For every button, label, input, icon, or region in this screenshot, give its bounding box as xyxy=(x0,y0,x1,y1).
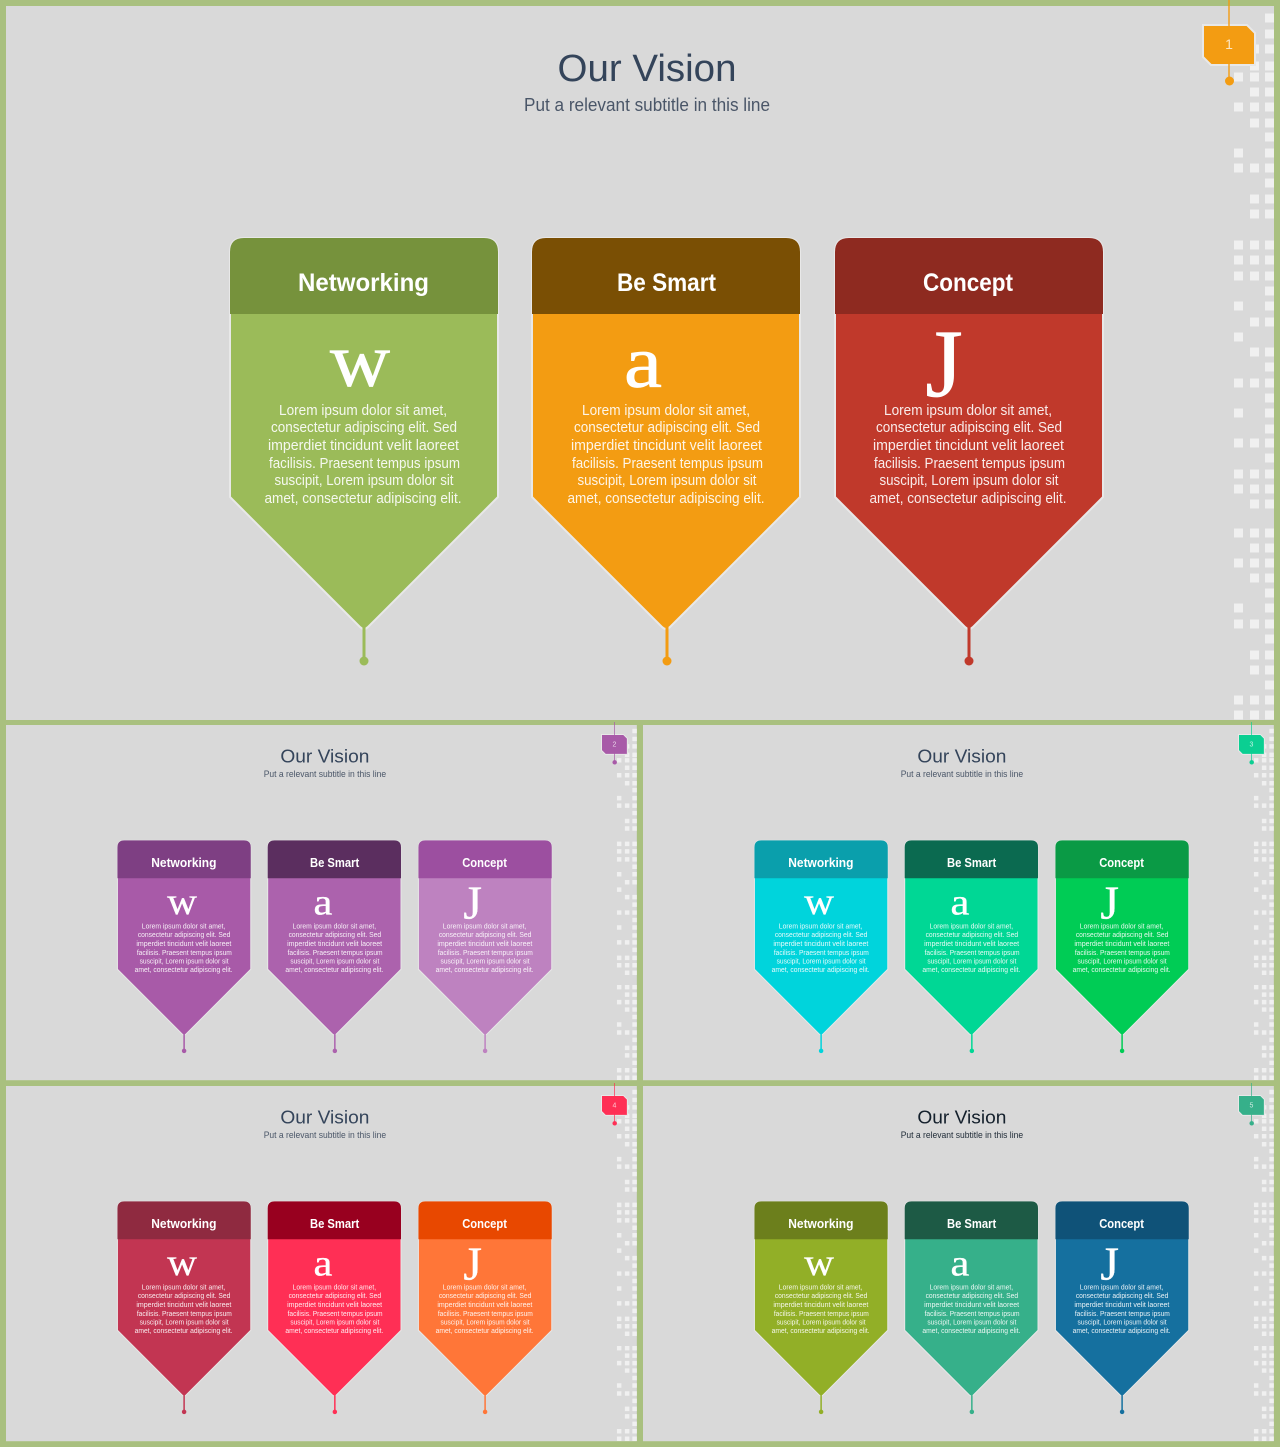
card: Concept: Concept xyxy=(1099,856,1144,870)
card: Be Smart: amet, consectetur adipiscing elit. xyxy=(922,1326,1020,1335)
card: Concept xyxy=(835,238,1103,666)
card: Be Smart: Lorem ipsum dolor sit amet, xyxy=(293,921,376,930)
card: Networking: w xyxy=(804,1242,835,1284)
card: Networking: consectetur adipiscing elit. Sed xyxy=(775,930,867,939)
card: Networking: suscipit, Lorem ipsum dolor sit xyxy=(140,956,229,965)
card: Concept: suscipit, Lorem ipsum dolor sit xyxy=(880,473,1058,489)
dot pattern xyxy=(1234,18,1274,715)
card: Be Smart: Lorem ipsum dolor sit amet, xyxy=(930,1282,1013,1291)
card: Be Smart: amet, consectetur adipiscing elit. xyxy=(922,965,1020,974)
card: Be Smart: suscipit, Lorem ipsum dolor sit xyxy=(927,1317,1016,1326)
card: Concept: Concept xyxy=(462,1217,507,1231)
card: Networking: imperdiet tincidunt velit laoreet xyxy=(268,438,459,454)
card: Concept: Lorem ipsum dolor sit amet, xyxy=(443,1282,526,1291)
title: Our Vision xyxy=(280,746,369,767)
card: Networking: facilisis. Praesent tempus ipsum xyxy=(137,1309,232,1318)
card: Networking: Lorem ipsum dolor sit amet, xyxy=(142,921,225,930)
card: Networking: Lorem ipsum dolor sit amet, xyxy=(279,403,447,419)
card: Networking: imperdiet tincidunt velit laoreet xyxy=(136,1300,231,1309)
card: Be Smart: suscipit, Lorem ipsum dolor sit xyxy=(290,1317,379,1326)
card: Be Smart: consectetur adipiscing elit. Sed xyxy=(926,1291,1018,1300)
card: Be Smart: Lorem ipsum dolor sit amet, xyxy=(930,921,1013,930)
page badge: 1 xyxy=(1225,36,1233,52)
card: Networking: facilisis. Praesent tempus ipsum xyxy=(269,456,460,472)
card: Concept: Concept xyxy=(923,269,1014,297)
card: Concept: Lorem ipsum dolor sit amet, xyxy=(1080,921,1163,930)
card: Concept: imperdiet tincidunt velit laoreet xyxy=(437,939,532,948)
card: Networking: Networking xyxy=(298,269,429,297)
card: Be Smart: facilisis. Praesent tempus ipsum xyxy=(288,1309,383,1318)
card: Concept: J xyxy=(463,877,482,930)
card: Networking: w xyxy=(804,881,835,923)
title: Our Vision xyxy=(558,48,736,90)
card: Concept: amet, consectetur adipiscing elit. xyxy=(436,965,534,974)
subtitle: Put a relevant subtitle in this line xyxy=(524,95,770,115)
card: Networking: consectetur adipiscing elit. Sed xyxy=(138,930,230,939)
card: Concept: Concept xyxy=(1099,1217,1144,1231)
card: Networking: amet, consectetur adipiscing elit. xyxy=(135,965,233,974)
card: Be Smart: imperdiet tincidunt velit laoreet xyxy=(924,1300,1019,1309)
card: Concept: imperdiet tincidunt velit laoreet xyxy=(437,1300,532,1309)
card: Networking: imperdiet tincidunt velit laoreet xyxy=(773,1300,868,1309)
card: Be Smart: consectetur adipiscing elit. Sed xyxy=(289,930,381,939)
card: Be Smart: Be Smart xyxy=(310,1217,359,1231)
card: Be Smart: Be Smart xyxy=(947,856,996,870)
card: Concept: Lorem ipsum dolor sit amet, xyxy=(884,403,1052,419)
card: Be Smart: imperdiet tincidunt velit laoreet xyxy=(571,438,762,454)
page badge: 2 xyxy=(613,741,617,748)
card: Networking: amet, consectetur adipiscing elit. xyxy=(772,1326,870,1335)
card: Networking: suscipit, Lorem ipsum dolor sit xyxy=(274,473,454,489)
card: Be Smart: facilisis. Praesent tempus ipsum xyxy=(925,948,1020,957)
card: Be Smart xyxy=(905,840,1038,1053)
panel: slide 1 large orange xyxy=(6,0,1274,720)
card: Be Smart: consectetur adipiscing elit. Sed xyxy=(574,420,760,436)
dot pattern xyxy=(1254,1092,1274,1439)
card: Concept: J xyxy=(925,310,963,417)
card: Networking: consectetur adipiscing elit. Sed xyxy=(138,1291,230,1300)
card: Be Smart: facilisis. Praesent tempus ipsum xyxy=(572,456,763,472)
card: Concept: imperdiet tincidunt velit laoreet xyxy=(873,438,1064,454)
card: Networking: suscipit, Lorem ipsum dolor sit xyxy=(777,1317,866,1326)
card: Be Smart: a xyxy=(950,882,969,923)
card: Concept xyxy=(418,1201,552,1414)
card: Be Smart xyxy=(532,238,800,666)
subtitle: Put a relevant subtitle in this line xyxy=(901,1130,1023,1140)
card: Be Smart: a xyxy=(624,322,662,404)
card: Concept: J xyxy=(463,1238,482,1291)
card: Networking xyxy=(754,1201,888,1414)
subtitle: Put a relevant subtitle in this line xyxy=(901,769,1023,779)
page badge xyxy=(1239,1083,1264,1126)
card: Be Smart: amet, consectetur adipiscing elit. xyxy=(568,491,764,507)
card: Networking: Lorem ipsum dolor sit amet, xyxy=(779,921,862,930)
card: Be Smart: consectetur adipiscing elit. Sed xyxy=(926,930,1018,939)
card: Concept: Lorem ipsum dolor sit amet, xyxy=(443,921,526,930)
card: Networking xyxy=(230,238,498,666)
card: Be Smart: imperdiet tincidunt velit laoreet xyxy=(287,1300,382,1309)
card: Concept: J xyxy=(1100,877,1119,930)
card: Concept: imperdiet tincidunt velit laoreet xyxy=(1074,939,1169,948)
card: Concept: suscipit, Lorem ipsum dolor sit xyxy=(441,1317,530,1326)
card: Concept: facilisis. Praesent tempus ipsum xyxy=(438,948,533,957)
card: Concept: consectetur adipiscing elit. Sed xyxy=(439,930,531,939)
card: Networking: facilisis. Praesent tempus ipsum xyxy=(774,948,869,957)
subtitle: Put a relevant subtitle in this line xyxy=(264,769,386,779)
card: Networking xyxy=(117,840,251,1053)
card: Concept: amet, consectetur adipiscing elit. xyxy=(1073,965,1171,974)
page badge: 3 xyxy=(1250,741,1254,748)
card: Concept xyxy=(418,840,552,1053)
card: Concept xyxy=(1055,1201,1189,1414)
card: Networking: Lorem ipsum dolor sit amet, xyxy=(142,1282,225,1291)
dot pattern xyxy=(617,731,637,1078)
card: Be Smart: Be Smart xyxy=(617,269,717,297)
card: Be Smart: imperdiet tincidunt velit laoreet xyxy=(287,939,382,948)
card: Be Smart: amet, consectetur adipiscing elit. xyxy=(285,965,383,974)
card: Concept: facilisis. Praesent tempus ipsum xyxy=(438,1309,533,1318)
card: Concept: consectetur adipiscing elit. Sed xyxy=(876,420,1062,436)
card: Networking: Lorem ipsum dolor sit amet, xyxy=(779,1282,862,1291)
title: Our Vision xyxy=(917,1107,1006,1128)
card: Concept: suscipit, Lorem ipsum dolor sit xyxy=(1078,1317,1167,1326)
card: Concept: consectetur adipiscing elit. Sed xyxy=(1076,1291,1168,1300)
card: Networking: w xyxy=(167,1242,198,1284)
title: Our Vision xyxy=(917,746,1006,767)
page badge: 4 xyxy=(613,1102,617,1109)
card: Concept: suscipit, Lorem ipsum dolor sit xyxy=(1078,956,1167,965)
card: Be Smart: Lorem ipsum dolor sit amet, xyxy=(582,403,750,419)
card: Concept: Concept xyxy=(462,856,507,870)
card: Networking: imperdiet tincidunt velit laoreet xyxy=(773,939,868,948)
card: Concept: Lorem ipsum dolor sit amet, xyxy=(1080,1282,1163,1291)
dot pattern xyxy=(617,1092,637,1439)
card: Networking xyxy=(117,1201,251,1414)
card: Be Smart: a xyxy=(313,1243,332,1284)
card: Concept: J xyxy=(1100,1238,1119,1291)
card: Be Smart: Be Smart xyxy=(947,1217,996,1231)
card: Networking: w xyxy=(167,881,198,923)
card: Networking: Networking xyxy=(151,1217,216,1231)
page badge xyxy=(1203,0,1255,86)
card: Be Smart xyxy=(268,1201,401,1414)
card: Networking: Networking xyxy=(151,856,216,870)
card: Be Smart: facilisis. Praesent tempus ipsum xyxy=(925,1309,1020,1318)
card: Concept: consectetur adipiscing elit. Sed xyxy=(439,1291,531,1300)
page badge xyxy=(1239,722,1264,765)
card: Networking: suscipit, Lorem ipsum dolor sit xyxy=(140,1317,229,1326)
page badge xyxy=(602,722,627,765)
subtitle: Put a relevant subtitle in this line xyxy=(264,1130,386,1140)
card: Concept: amet, consectetur adipiscing elit. xyxy=(1073,1326,1171,1335)
card: Be Smart: suscipit, Lorem ipsum dolor sit xyxy=(927,956,1016,965)
card: Networking xyxy=(754,840,888,1053)
card: Be Smart: a xyxy=(950,1243,969,1284)
card: Networking: consectetur adipiscing elit. Sed xyxy=(271,420,457,436)
card: Networking: w xyxy=(330,319,390,403)
card: Be Smart: suscipit, Lorem ipsum dolor sit xyxy=(290,956,379,965)
card: Concept: consectetur adipiscing elit. Sed xyxy=(1076,930,1168,939)
card: Networking: amet, consectetur adipiscing elit. xyxy=(772,965,870,974)
title: Our Vision xyxy=(280,1107,369,1128)
card: Networking: amet, consectetur adipiscing elit. xyxy=(135,1326,233,1335)
page badge xyxy=(602,1083,627,1126)
card: Networking: imperdiet tincidunt velit laoreet xyxy=(136,939,231,948)
card: Concept: facilisis. Praesent tempus ipsum xyxy=(1075,1309,1170,1318)
card: Concept: facilisis. Praesent tempus ipsum xyxy=(1075,948,1170,957)
card: Be Smart: imperdiet tincidunt velit laoreet xyxy=(924,939,1019,948)
card: Concept: facilisis. Praesent tempus ipsum xyxy=(874,456,1065,472)
card: Networking: facilisis. Praesent tempus ipsum xyxy=(774,1309,869,1318)
card: Be Smart xyxy=(268,840,401,1053)
card: Networking: Networking xyxy=(788,1217,853,1231)
card: Networking: facilisis. Praesent tempus ipsum xyxy=(137,948,232,957)
card: Concept: amet, consectetur adipiscing elit. xyxy=(870,491,1066,507)
card: Be Smart: suscipit, Lorem ipsum dolor sit xyxy=(578,473,756,489)
dot pattern xyxy=(1254,731,1274,1078)
card: Be Smart: a xyxy=(313,882,332,923)
panel: slide 5 green and blue xyxy=(643,1083,1274,1441)
card: Be Smart: Be Smart xyxy=(310,856,359,870)
card: Networking: amet, consectetur adipiscing elit. xyxy=(264,491,462,507)
card: Concept: amet, consectetur adipiscing elit. xyxy=(436,1326,534,1335)
card: Networking: consectetur adipiscing elit. Sed xyxy=(775,1291,867,1300)
page badge: 5 xyxy=(1250,1102,1254,1109)
card: Be Smart: facilisis. Praesent tempus ipsum xyxy=(288,948,383,957)
card: Be Smart xyxy=(905,1201,1038,1414)
card: Be Smart: Lorem ipsum dolor sit amet, xyxy=(293,1282,376,1291)
panel: slide 3 teal xyxy=(643,722,1274,1080)
card: Networking: suscipit, Lorem ipsum dolor sit xyxy=(777,956,866,965)
card: Concept xyxy=(1055,840,1189,1053)
card: Be Smart: amet, consectetur adipiscing elit. xyxy=(285,1326,383,1335)
panel: slide 2 purple xyxy=(6,722,637,1080)
card: Concept: imperdiet tincidunt velit laoreet xyxy=(1074,1300,1169,1309)
card: Concept: suscipit, Lorem ipsum dolor sit xyxy=(441,956,530,965)
panel: slide 4 red xyxy=(6,1083,637,1441)
card: Networking: Networking xyxy=(788,856,853,870)
card: Be Smart: consectetur adipiscing elit. Sed xyxy=(289,1291,381,1300)
